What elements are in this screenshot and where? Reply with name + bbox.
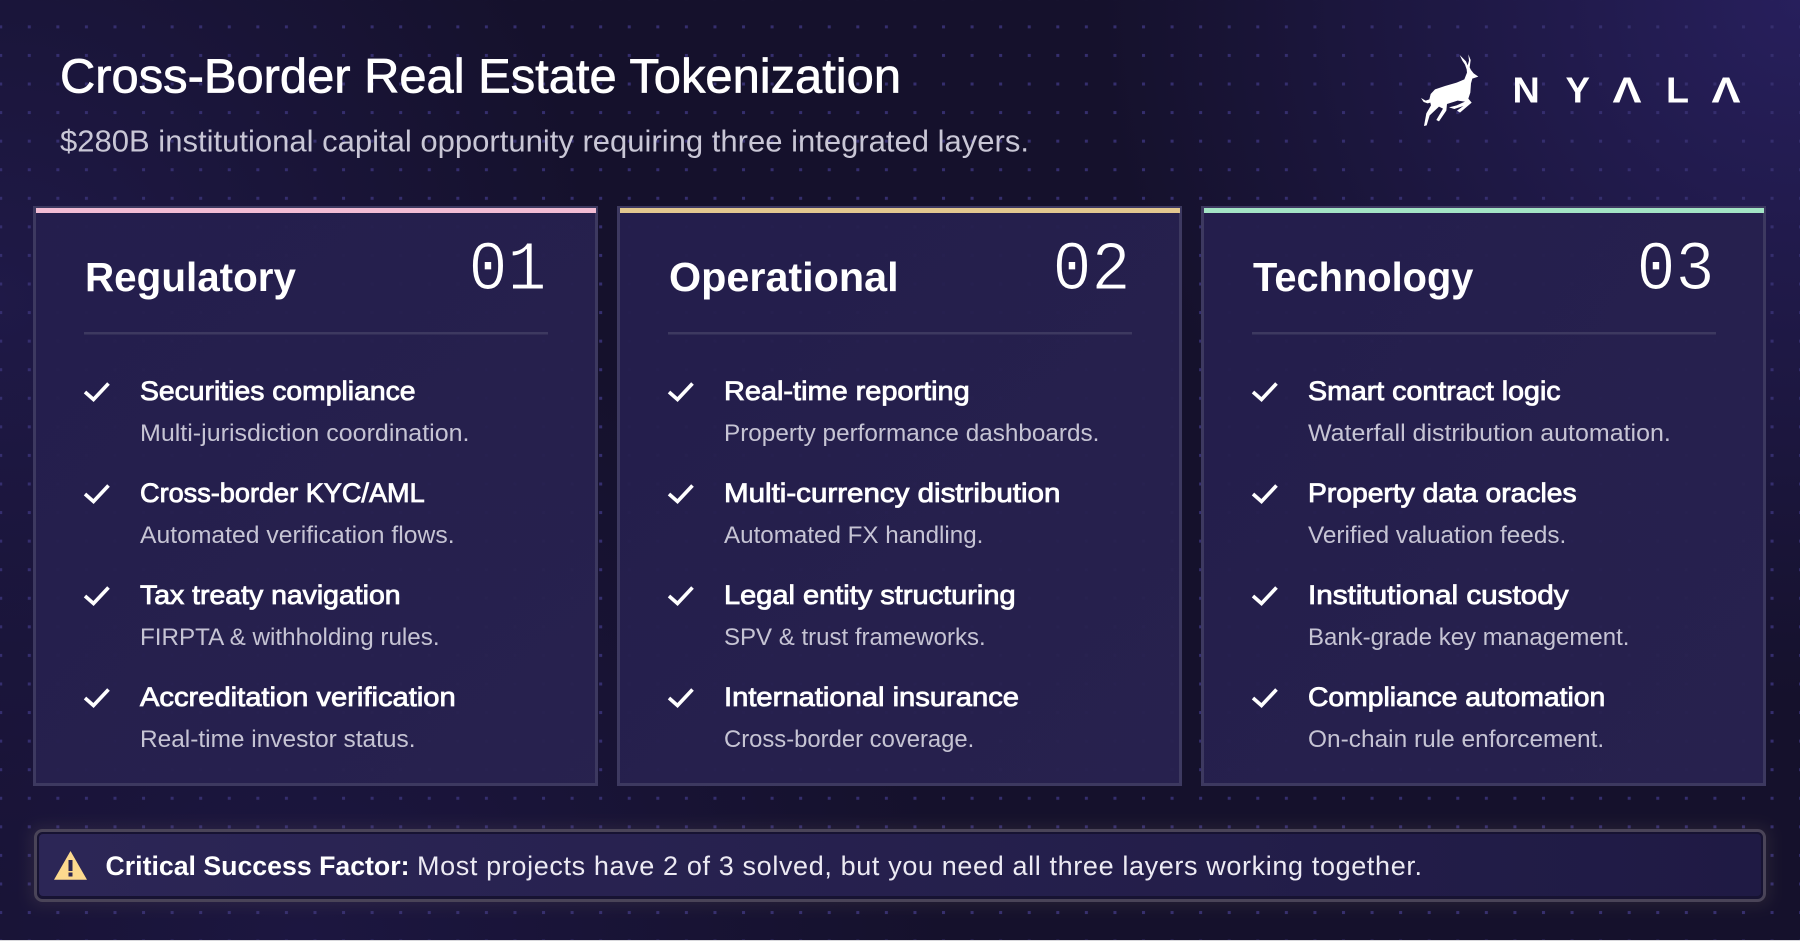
wordmark: Λ xyxy=(1712,70,1740,111)
item: real-time reporting: Real-time reporting xyxy=(724,376,970,406)
item: tax treaty navigation xyxy=(85,580,440,651)
item: real-time reporting: Property performance dashboards. xyxy=(724,420,1099,447)
wordmark xyxy=(1512,70,1740,111)
item: compliance automation: On-chain rule enforcement. xyxy=(1308,726,1604,753)
wordmark: Λ xyxy=(1612,70,1642,111)
heading: Regulatory xyxy=(85,254,296,300)
callout: critical success factor: Most projects have 2 of 3 solved, but you need all three layers working together. xyxy=(417,851,1422,881)
item: institutional custody xyxy=(1253,580,1629,651)
accent bar xyxy=(620,208,1180,213)
icon: leaping antelope xyxy=(1421,54,1478,126)
item: accreditation verification xyxy=(85,682,456,753)
accent bar xyxy=(36,208,596,213)
item: securities compliance: Multi-jurisdiction coordination. xyxy=(140,420,470,447)
panel: operational xyxy=(618,208,1180,784)
item: multi-currency distribution: Automated FX handling. xyxy=(724,522,983,549)
number: 03 xyxy=(1636,232,1714,311)
card background xyxy=(1202,208,1764,784)
item: smart contract logic: Waterfall distribution automation. xyxy=(1308,420,1671,447)
item: property data oracles: Verified valuation feeds. xyxy=(1308,522,1566,549)
item: legal entity structuring xyxy=(669,580,1016,651)
wordmark: Y xyxy=(1566,70,1590,111)
panel: regulatory xyxy=(34,208,596,784)
item: cross-border KYC/AML xyxy=(85,478,455,549)
card background xyxy=(618,208,1180,784)
item: securities compliance xyxy=(85,376,470,447)
item: tax treaty navigation: Tax treaty navigation xyxy=(140,580,401,610)
logo: Nyala xyxy=(1421,54,1740,126)
item: multi-currency distribution xyxy=(669,478,1060,549)
item: real-time reporting xyxy=(669,376,1099,447)
item: institutional custody: Institutional custody xyxy=(1308,580,1569,610)
item: multi-currency distribution: Multi-currency distribution xyxy=(724,478,1060,508)
item: cross-border KYC/AML: Cross-border KYC/AML xyxy=(140,478,425,508)
item: property data oracles xyxy=(1253,478,1577,549)
subtitle: $280B institutional capital opportunity requiring three integrated layers. xyxy=(60,124,1029,158)
callout text: Critical Success Factor: xyxy=(106,851,410,881)
item: smart contract logic: Smart contract logic xyxy=(1308,376,1561,406)
callout: critical success factor xyxy=(30,826,1770,906)
item: international insurance: Cross-border coverage. xyxy=(724,726,974,753)
item: cross-border KYC/AML: Automated verification flows. xyxy=(140,522,455,549)
item: accreditation verification: Real-time investor status. xyxy=(140,726,416,753)
title: Cross-Border Real Estate Tokenization xyxy=(60,50,901,104)
number: 01 xyxy=(468,232,546,311)
item: tax treaty navigation: FIRPTA & withholding rules. xyxy=(140,624,440,651)
item: compliance automation xyxy=(1253,682,1605,753)
wordmark: L xyxy=(1666,70,1689,111)
accent bar xyxy=(1204,208,1764,213)
item: securities compliance: Securities compliance xyxy=(140,376,416,406)
number: 02 xyxy=(1052,232,1130,311)
icon: warning triangle xyxy=(54,851,87,880)
panel: technology xyxy=(1202,208,1764,784)
item: accreditation verification: Accreditation verification xyxy=(140,682,456,712)
item: legal entity structuring: Legal entity structuring xyxy=(724,580,1016,610)
heading: Technology xyxy=(1253,254,1474,300)
item: compliance automation: Compliance automation xyxy=(1308,682,1605,712)
card background xyxy=(34,208,596,784)
item: smart contract logic xyxy=(1253,376,1671,447)
item: institutional custody: Bank-grade key management. xyxy=(1308,624,1629,651)
item: international insurance xyxy=(669,682,1019,753)
item: international insurance: International insurance xyxy=(724,682,1019,712)
item: property data oracles: Property data oracles xyxy=(1308,478,1577,508)
item: legal entity structuring: SPV & trust frameworks. xyxy=(724,624,986,651)
heading: Operational xyxy=(669,254,899,300)
wordmark: N xyxy=(1512,70,1540,111)
